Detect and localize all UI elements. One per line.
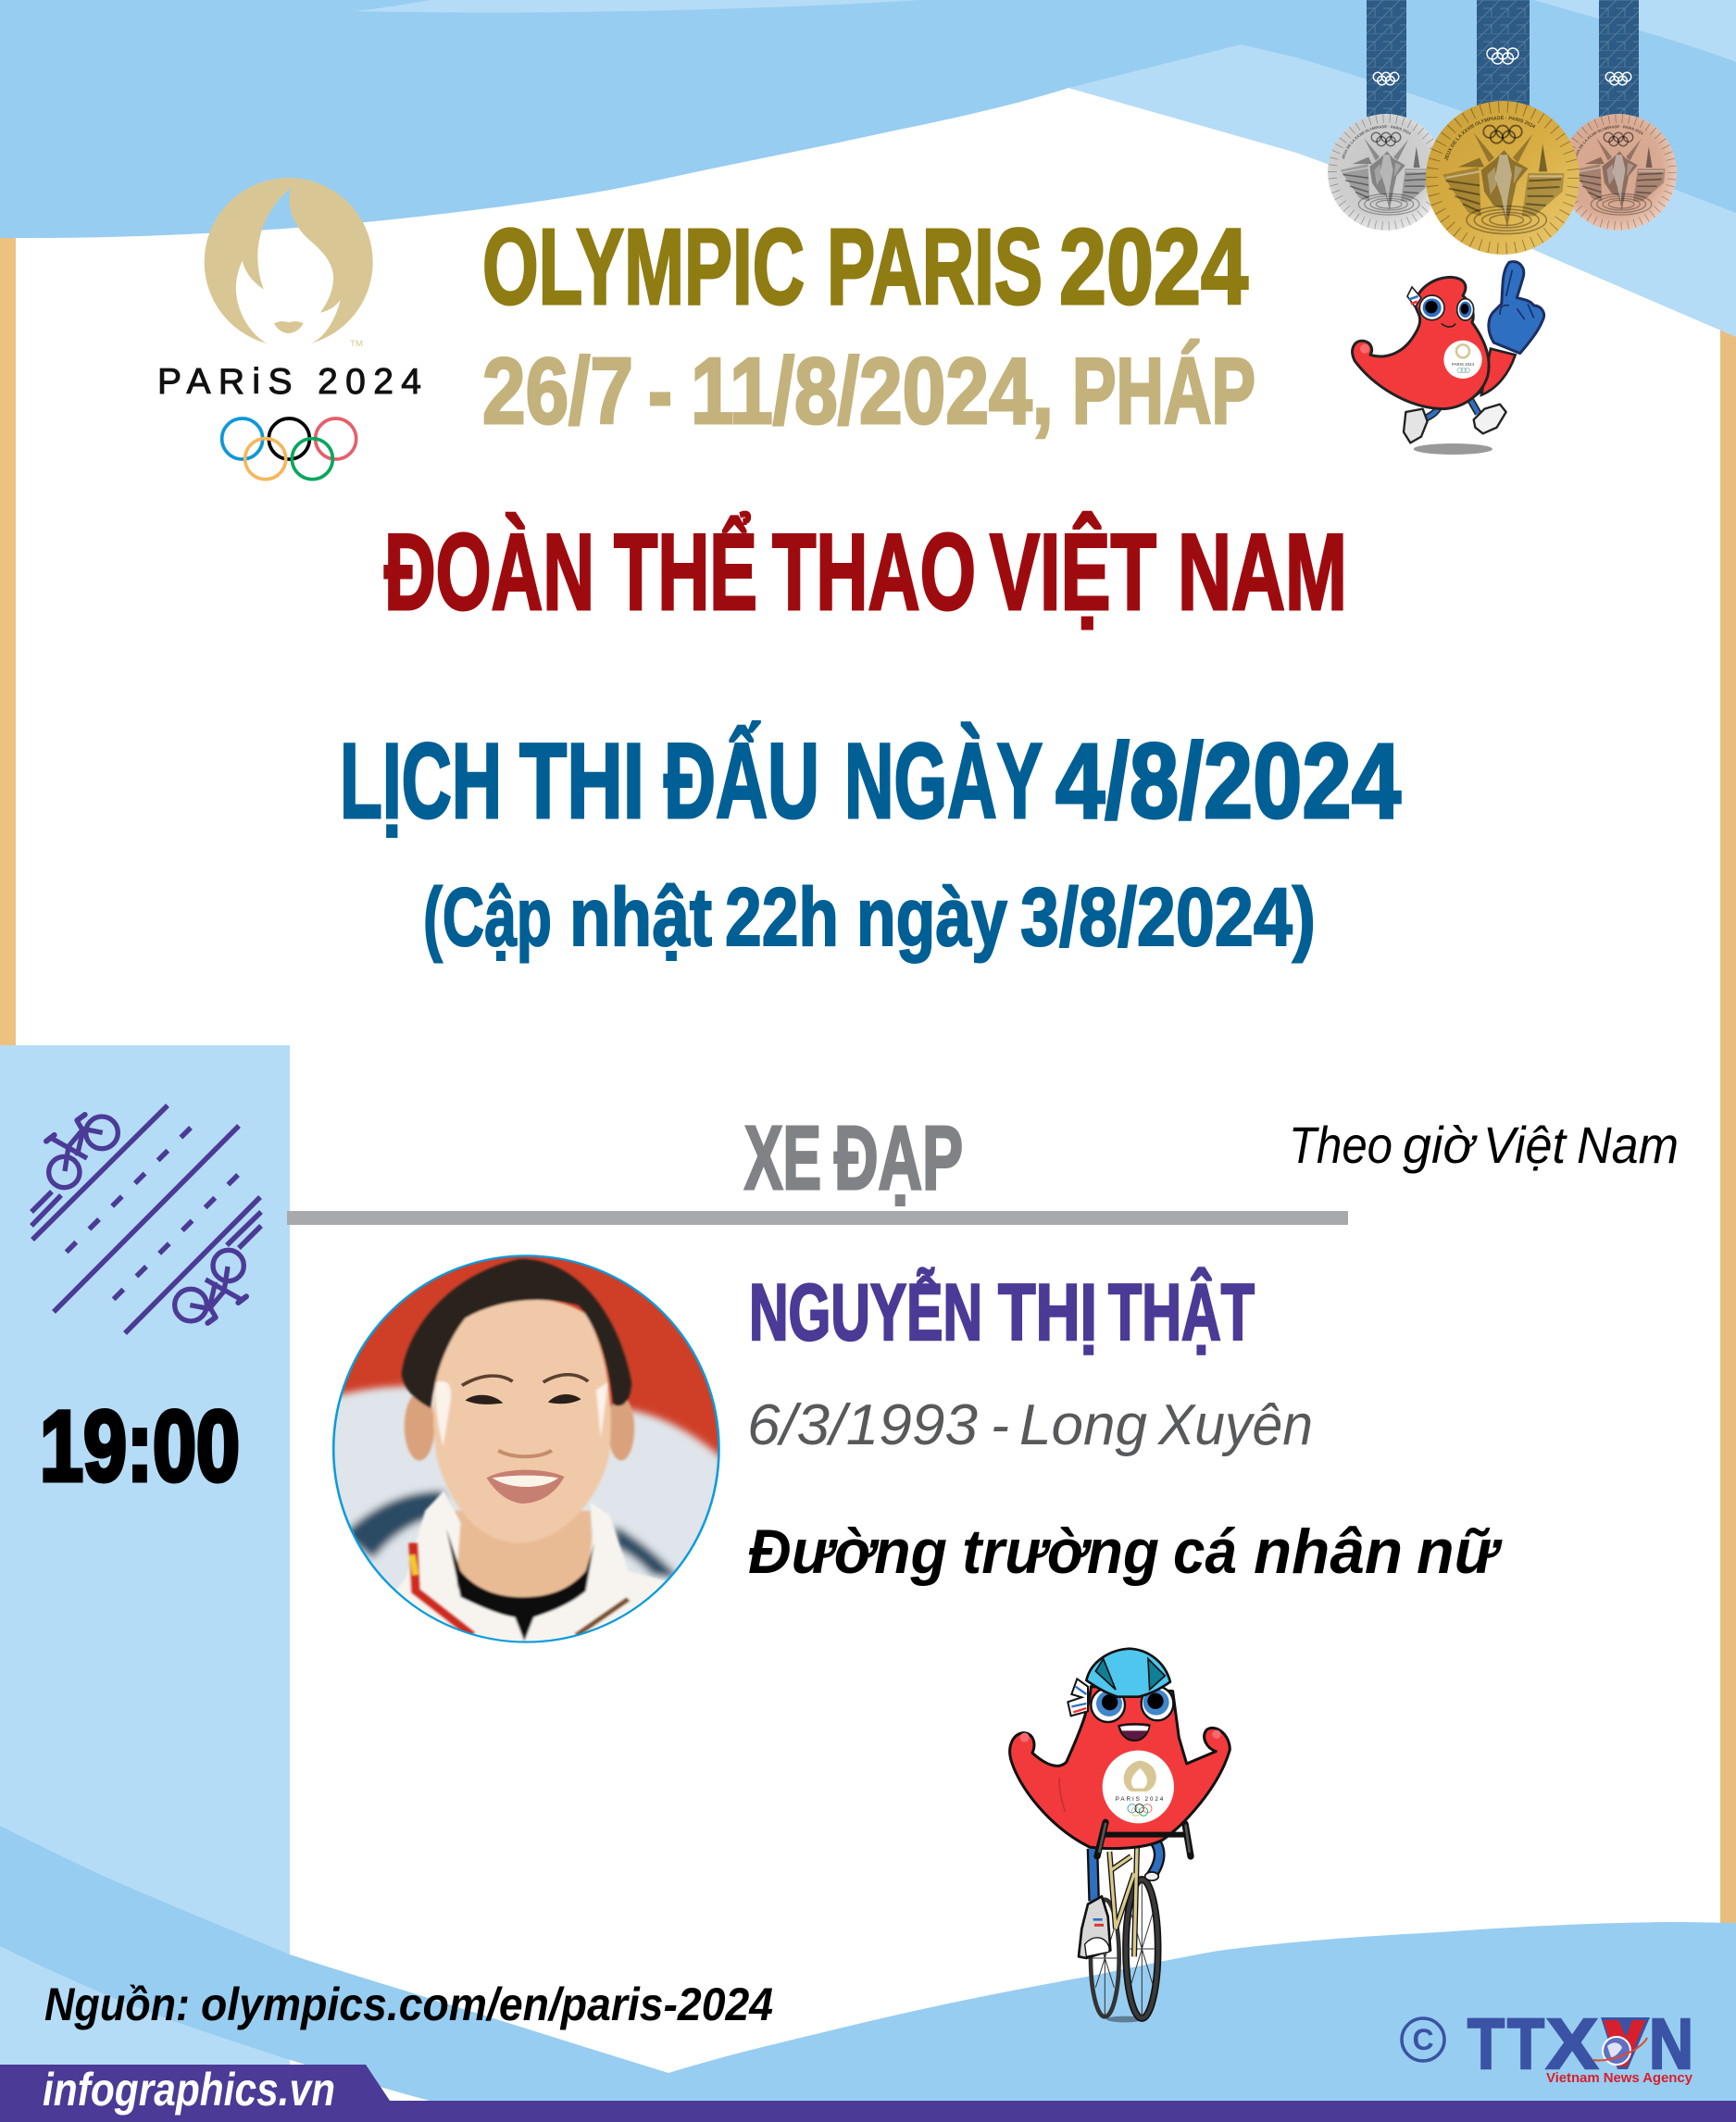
silver ribbon	[1367, 0, 1406, 120]
athlete name: THẬT	[1108, 1268, 1255, 1357]
heading: schedule date	[340, 722, 1401, 841]
body	[1010, 1687, 1230, 1849]
legs	[1419, 392, 1479, 421]
left time column	[0, 1045, 290, 2122]
TTXVN wordmark	[1467, 2004, 1693, 2084]
blue foam hand	[1489, 262, 1544, 354]
Paris 2024 wordmark: PARiS 2024	[157, 362, 421, 402]
event name: trường	[962, 1517, 1159, 1587]
copyright mark	[1402, 2018, 1444, 2061]
olympic rings	[222, 418, 356, 480]
arm	[1481, 349, 1516, 395]
logo: TTXVN copyright	[1402, 2004, 1693, 2086]
title: Olympic Paris 2024: OLYMPIC	[482, 206, 805, 327]
timezone note: Theo	[1289, 1116, 1393, 1174]
arm crease	[1059, 1778, 1066, 1812]
heading: schedule date: NGÀY	[844, 722, 1043, 841]
heading: Doan the thao Viet Nam	[384, 511, 1347, 632]
shoe	[1079, 1896, 1110, 1958]
legs	[1093, 1842, 1159, 1901]
helmet	[1086, 1649, 1170, 1697]
sport heading: XE	[744, 1107, 821, 1208]
bronze ribbon	[1599, 0, 1639, 120]
subtitle: dates	[482, 340, 1255, 443]
timezone note: Nam	[1577, 1116, 1679, 1174]
athlete birth info: 6/3/1993	[747, 1393, 978, 1457]
athlete photo	[326, 1250, 728, 1652]
TTXVN wordmark: T	[1507, 2004, 1544, 2084]
athlete birth info: Long	[1019, 1393, 1147, 1457]
heading: Doan the thao Viet Nam: NAM	[1178, 511, 1347, 632]
source line: Nguồn:	[44, 1978, 190, 2030]
body	[1353, 277, 1489, 409]
athlete birth info	[747, 1393, 1313, 1457]
TTXVN wordmark: T	[1467, 2004, 1505, 2084]
heading: schedule date: LỊCH	[340, 722, 502, 841]
subtitle: dates: -	[648, 340, 672, 443]
underside	[1419, 386, 1484, 409]
title: Olympic Paris 2024: PARIS	[827, 206, 1043, 327]
athlete birth info: -	[991, 1393, 1009, 1457]
mascot running	[1353, 262, 1544, 455]
event name: nhân	[1254, 1517, 1403, 1587]
subtitle: dates: 11/8/2024,	[691, 340, 1054, 443]
source line: olympics.com/en/paris-2024	[201, 1978, 773, 2030]
ribbon rings	[1373, 48, 1631, 85]
event name: nữ	[1417, 1517, 1503, 1587]
eyes	[1419, 295, 1474, 320]
logo badge: PARIS 2024	[1116, 1796, 1164, 1803]
event name	[748, 1517, 1503, 1587]
sport heading: ĐẠP	[834, 1107, 963, 1208]
cockade	[1068, 1679, 1088, 1716]
red V accent	[1604, 2020, 1645, 2066]
copyright mark: C	[1412, 2023, 1434, 2056]
timezone note: giờ	[1403, 1116, 1478, 1174]
purple footer bar	[0, 2101, 1736, 2122]
shadow	[1414, 443, 1492, 455]
right orange edge strip	[1720, 315, 1736, 1930]
heading: Doan the thao Viet Nam: THỂ	[614, 511, 757, 632]
time: 19:00	[40, 1390, 240, 1502]
title: Olympic Paris 2024	[482, 206, 1248, 327]
cockade	[1407, 287, 1421, 307]
TTXVN wordmark: N	[1649, 2004, 1693, 2084]
trademark: TM	[350, 339, 363, 348]
timezone note	[1289, 1116, 1679, 1174]
front wheel	[1126, 1879, 1158, 2018]
heading: Doan the thao Viet Nam: ĐOÀN	[384, 511, 594, 632]
gold ribbon	[1477, 0, 1530, 109]
logo: Paris 2024 emblem	[157, 178, 421, 480]
bronze medal	[1560, 114, 1677, 231]
subheading: update time	[423, 870, 1316, 963]
divider bar	[287, 1211, 1348, 1225]
event name: Đường	[748, 1517, 947, 1587]
globe	[1593, 2037, 1647, 2065]
emblem flame and face	[205, 178, 373, 343]
heading: schedule date: THI	[519, 722, 644, 841]
sport heading	[744, 1107, 963, 1208]
top small highlight	[355, 0, 921, 13]
left orange edge strip	[0, 231, 16, 1046]
heading: Doan the thao Viet Nam: VIỆT	[990, 511, 1156, 632]
smile	[1442, 323, 1455, 327]
subtitle: dates: PHÁP	[1072, 340, 1255, 443]
subheading: update time: 3/8/2024)	[1020, 870, 1316, 963]
heading: schedule date: ĐẤU	[664, 722, 819, 841]
bottom blue shape	[0, 1826, 1736, 2101]
agency line: Vietnam News Agency	[1546, 2070, 1693, 2086]
subheading: update time: ngày	[856, 870, 1007, 963]
eyes	[1091, 1687, 1173, 1722]
shadow	[1106, 2016, 1143, 2022]
left shoe	[1404, 409, 1428, 443]
gold medal	[1426, 101, 1580, 255]
title: Olympic Paris 2024: 2024	[1059, 206, 1248, 327]
athlete name: THỊ	[998, 1268, 1097, 1357]
subheading: update time: 22h	[725, 870, 839, 963]
highlights	[1020, 1730, 1221, 1742]
logo badge	[1443, 341, 1482, 379]
athlete name	[749, 1268, 1255, 1357]
subheading: update time: nhật	[569, 870, 712, 963]
top light blue wave	[1068, 0, 1736, 337]
mascot cyclist	[1010, 1649, 1230, 2022]
rear wheel	[1091, 1900, 1119, 2016]
right shoe	[1474, 405, 1506, 433]
subheading: update time: (Cập	[423, 870, 552, 963]
TTXVN wordmark: X	[1546, 2004, 1598, 2084]
second shoe	[1145, 1872, 1158, 1880]
infographics tab: infographics.vn	[43, 2064, 335, 2116]
top mid blue wave	[0, 0, 1736, 238]
handlebar	[1097, 1822, 1191, 1856]
nub highlight	[1360, 344, 1369, 354]
icon: cycling road	[31, 1105, 261, 1333]
subtitle: dates: 26/7	[482, 340, 633, 443]
heading: Doan the thao Viet Nam: THAO	[772, 511, 976, 632]
medals	[1328, 0, 1677, 255]
event name: cá	[1173, 1517, 1237, 1587]
timezone note: Việt	[1483, 1116, 1567, 1174]
mouth	[1118, 1724, 1150, 1741]
logo badge	[1103, 1751, 1174, 1823]
athlete birth info: Xuyên	[1156, 1393, 1313, 1457]
logo badge: PARIS 2024	[1452, 362, 1475, 367]
athlete name: NGUYỄN	[749, 1268, 982, 1357]
frame	[1109, 1836, 1137, 1956]
heading: schedule date: 4/8/2024	[1055, 722, 1401, 841]
leg fill	[1419, 392, 1479, 421]
silver medal	[1328, 114, 1444, 231]
